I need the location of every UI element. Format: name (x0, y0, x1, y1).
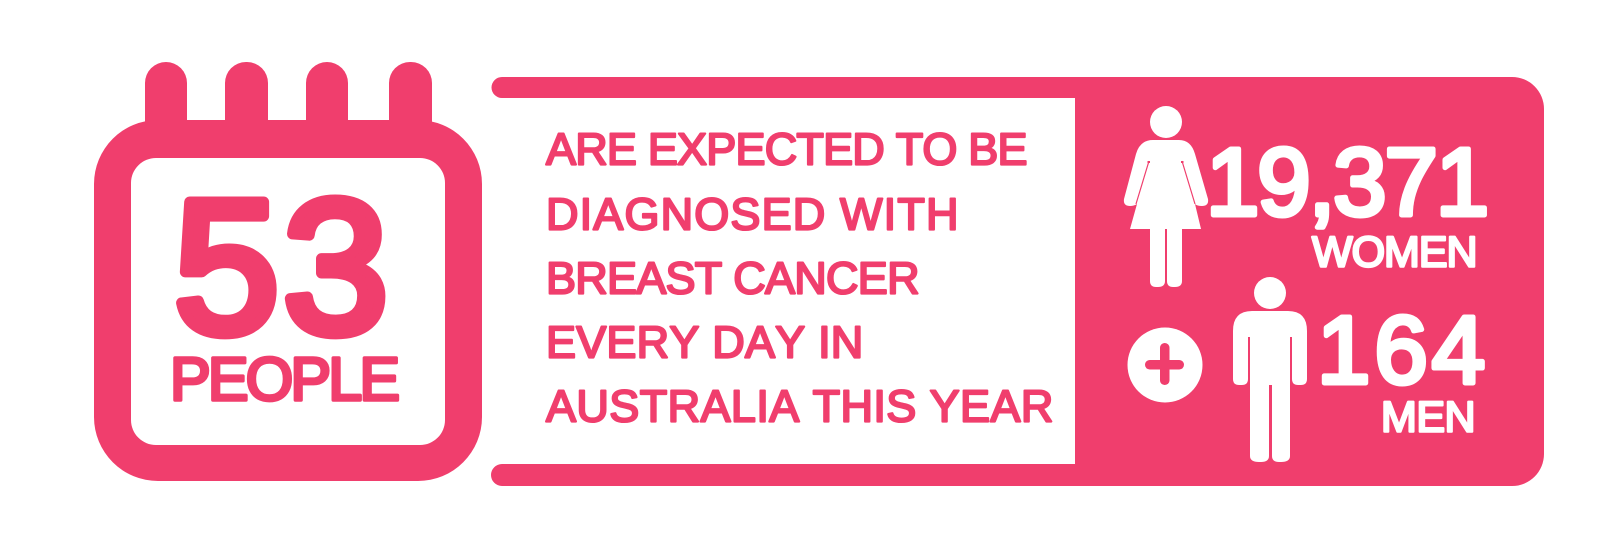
text block: diagnosis statement: AUSTRALIA THIS YEAR (546, 380, 1054, 432)
figure: women count: 19,371 (1206, 129, 1487, 236)
text block: diagnosis statement: EVERY DAY IN (546, 316, 864, 368)
calendar frame (94, 120, 482, 481)
calendar rings (145, 62, 432, 142)
big number 53: 53 (174, 162, 392, 373)
label: people: PEOPLE (170, 345, 398, 413)
text block: diagnosis statement: BREAST CANCER (546, 252, 919, 304)
text block: diagnosis statement: ARE EXPECTED TO BE (546, 124, 1027, 174)
figure: men count: 164 (1317, 297, 1489, 404)
icon: woman (1124, 106, 1208, 287)
text block: diagnosis statement (546, 124, 1054, 432)
label: men: MEN (1381, 394, 1475, 442)
text block: diagnosis statement: DIAGNOSED WITH (546, 188, 960, 240)
banner background (491, 77, 1544, 486)
label: women: WOMEN (1312, 228, 1477, 276)
icon: man (1233, 277, 1307, 462)
panel: message banner (491, 77, 1544, 486)
panel: calendar (94, 62, 482, 481)
icon: plus sign (1128, 328, 1202, 402)
